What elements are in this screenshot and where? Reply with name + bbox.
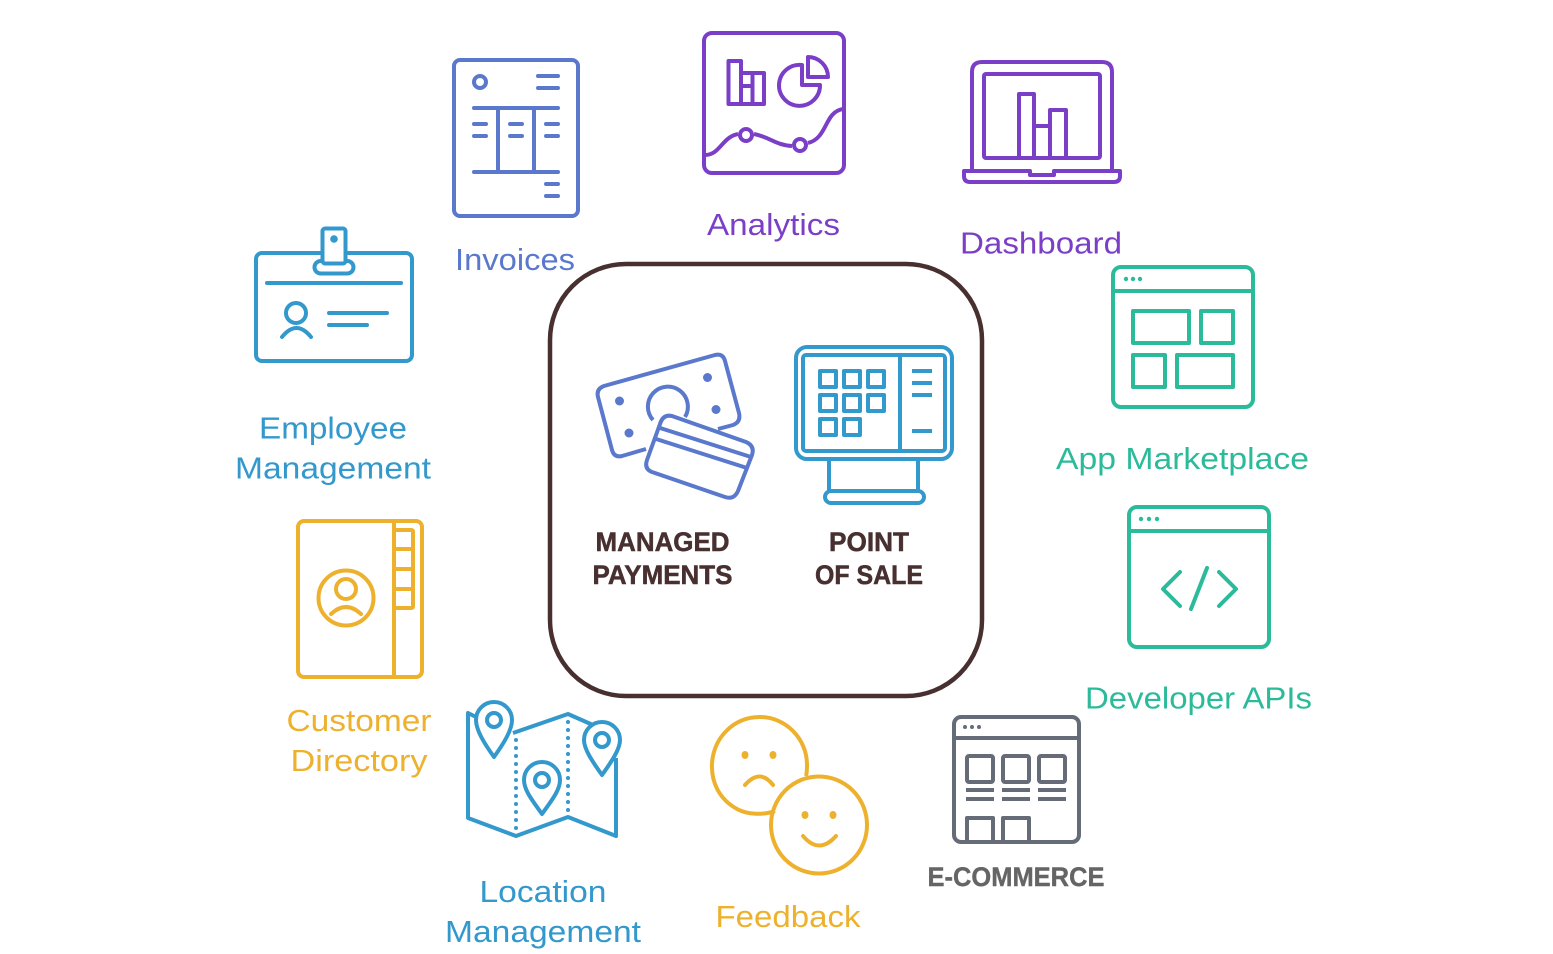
label: feedback: Feedback <box>716 899 861 934</box>
icon: folded map with pins <box>468 702 620 836</box>
item: employee management <box>235 228 431 486</box>
icon: invoice document <box>454 60 578 216</box>
icon: cash and credit card <box>598 355 753 498</box>
text: managed payments: PAYMENTS <box>592 560 732 590</box>
icon: laptop dashboard <box>964 62 1120 182</box>
item: feedback <box>712 717 867 934</box>
item: e-commerce <box>928 717 1104 892</box>
item: location management <box>445 702 641 949</box>
item: dashboard <box>960 62 1122 260</box>
panel: central rounded box <box>550 264 982 696</box>
item: invoices <box>454 60 578 277</box>
item: developer apis <box>1085 507 1312 716</box>
text: point of sale: OF SALE <box>815 560 923 590</box>
label: e-commerce: E-COMMERCE <box>928 862 1104 892</box>
item: app marketplace <box>1056 267 1309 476</box>
icon: employee badge <box>256 228 412 361</box>
text: managed payments: MANAGED <box>596 527 730 557</box>
icon: app layout window <box>1113 267 1253 407</box>
label: employee management: Employee <box>259 410 407 446</box>
label: developer apis: Developer APIs <box>1085 680 1312 716</box>
icon: storefront window <box>954 717 1079 842</box>
icon: address book <box>298 521 422 677</box>
label: location management: Management <box>445 914 641 949</box>
label: analytics: Analytics <box>707 207 840 242</box>
icon: sad and happy faces <box>712 717 867 874</box>
item: analytics <box>704 33 844 242</box>
icon: code window <box>1129 507 1269 647</box>
item: customer directory <box>286 521 432 778</box>
label: employee management: Management <box>235 450 431 486</box>
label: app marketplace: App Marketplace <box>1056 441 1309 476</box>
label: customer directory: Customer <box>286 703 432 738</box>
text: point of sale: POINT <box>829 527 909 557</box>
label: dashboard: Dashboard <box>960 226 1122 260</box>
label: location management: Location <box>480 874 606 909</box>
label: customer directory: Directory <box>290 743 428 778</box>
icon: point of sale terminal <box>796 347 952 503</box>
label: invoices: Invoices <box>455 242 575 277</box>
icon: analytics charts <box>704 33 844 173</box>
